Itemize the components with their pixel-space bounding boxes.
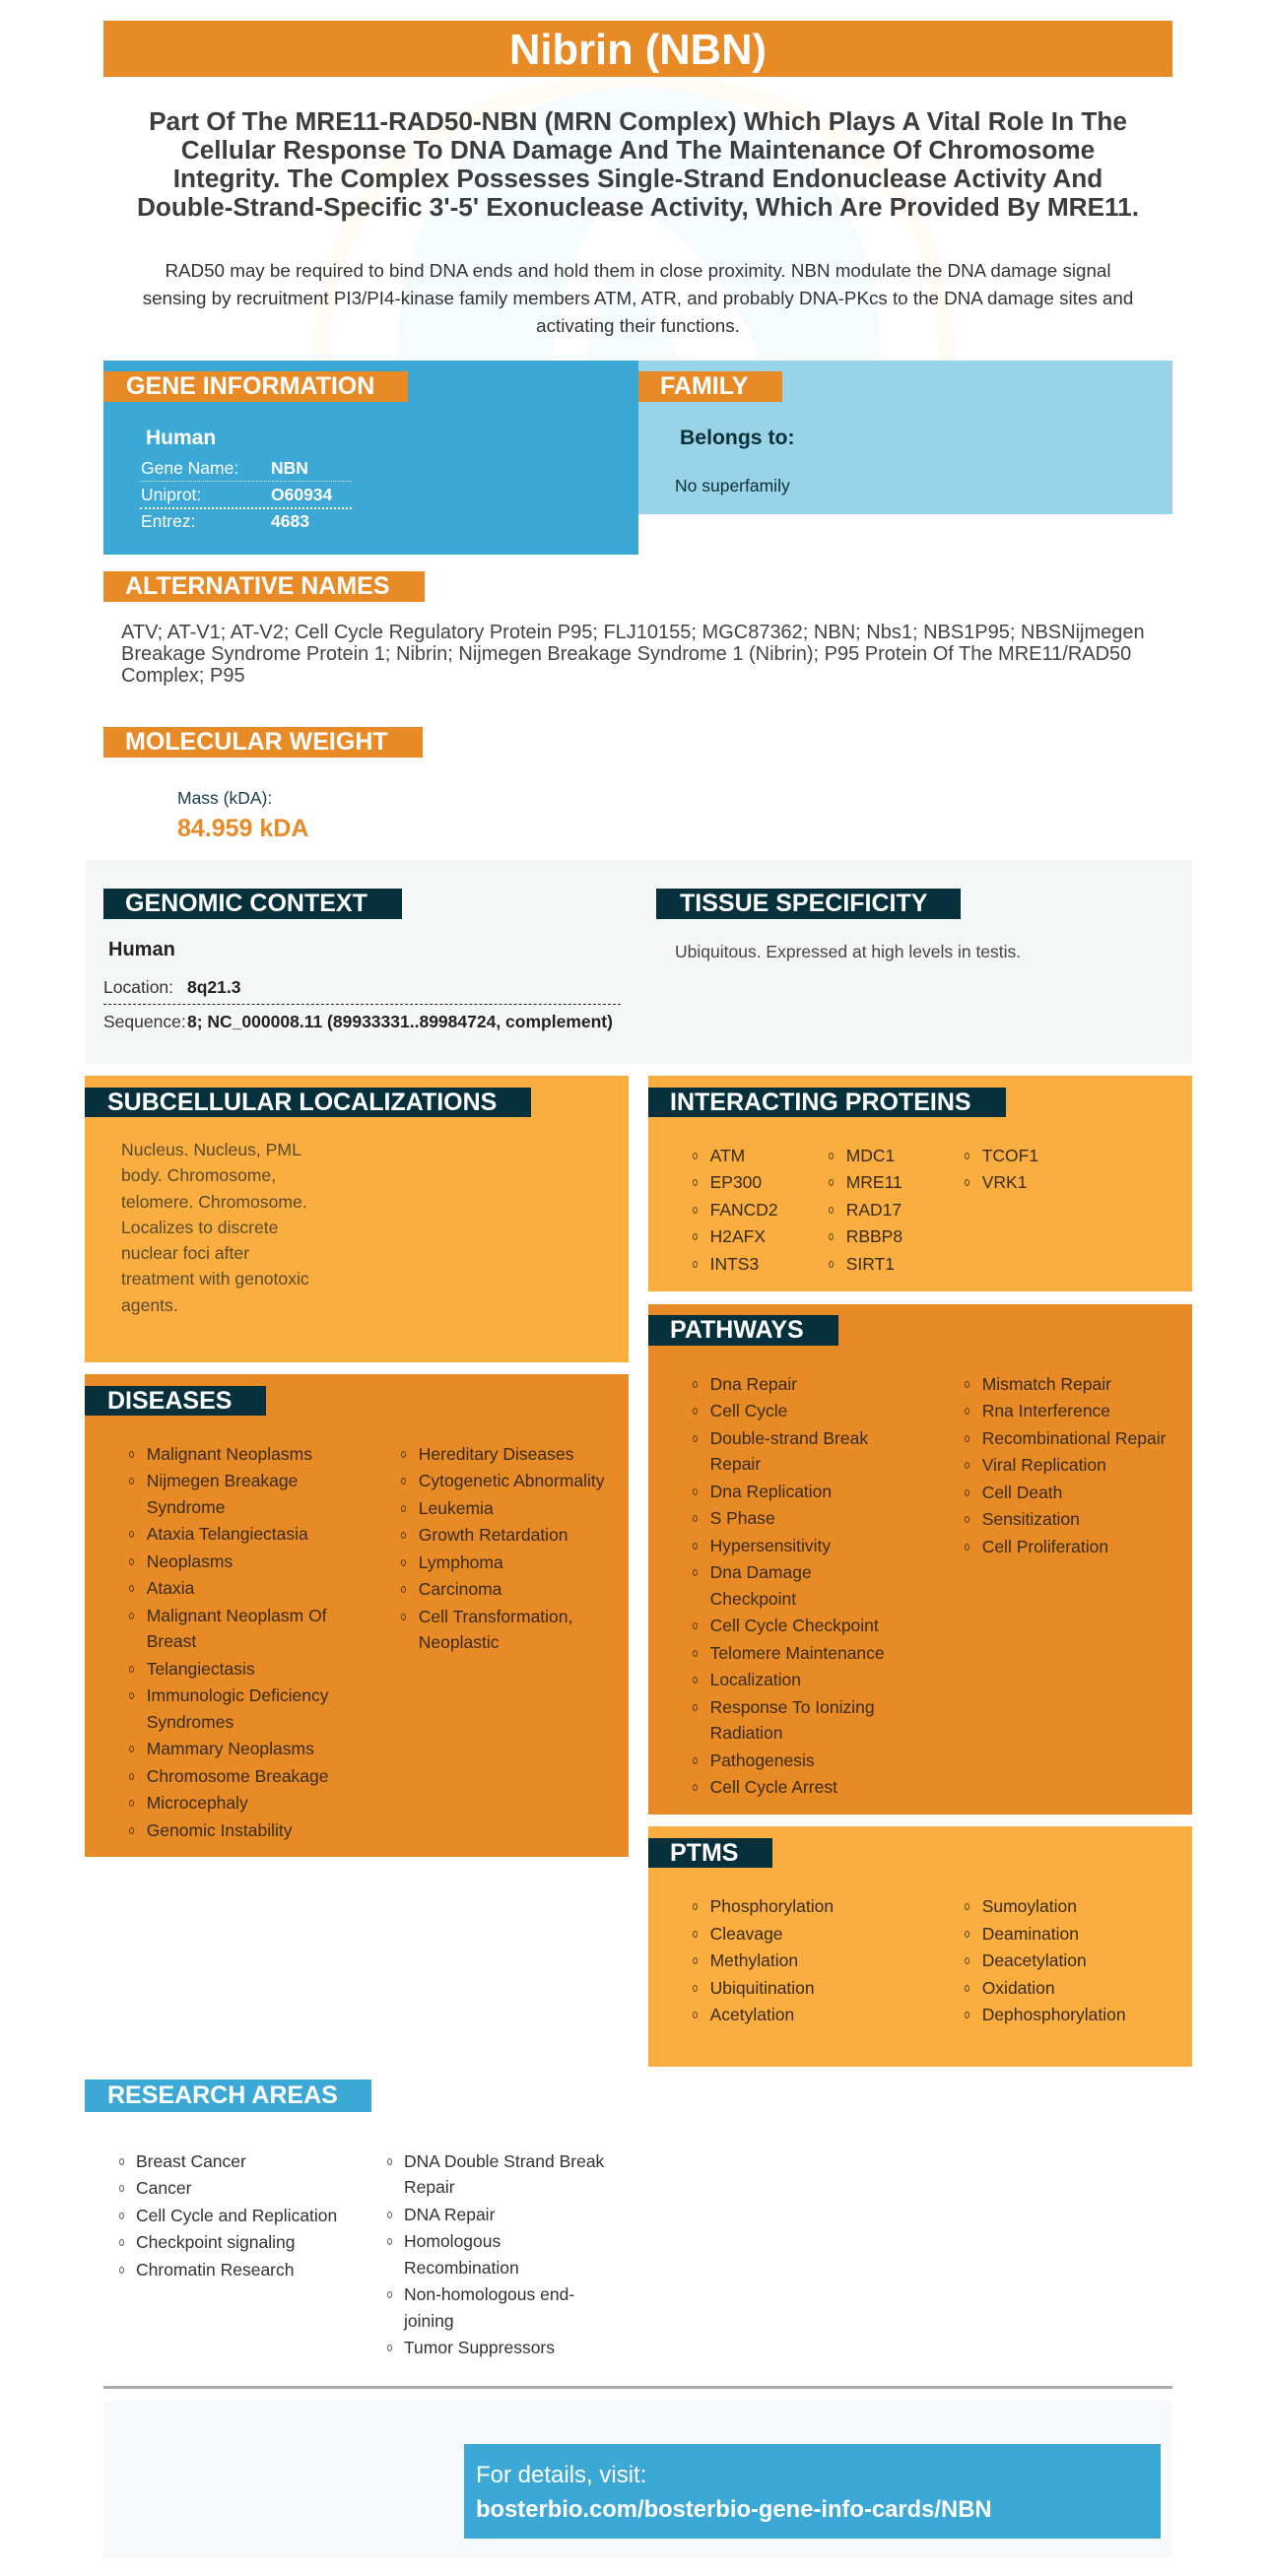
list column 2: Sensitization: [982, 1509, 1080, 1529]
gene name row: [140, 458, 352, 482]
research list column 2: [387, 2151, 605, 2357]
list column 1: Chromosome Breakage: [147, 1766, 329, 1786]
heading: diseases: [85, 1386, 266, 1416]
title: Nibrin (NBN): [509, 27, 767, 74]
list column 1: Phosphorylation: [710, 1896, 834, 1916]
list column 1: H2AFX: [710, 1226, 766, 1246]
list column 2: Neoplastic: [419, 1632, 500, 1652]
list column 1: Repair: [710, 1454, 761, 1474]
heading: alternative names: ALTERNATIVE NAMES: [125, 572, 390, 600]
list column 1: Syndrome: [147, 1497, 225, 1517]
research list column 1: [119, 2151, 337, 2279]
localization text: Localizes to discrete: [121, 1218, 278, 1237]
research list column 2: Non-homologous end-: [404, 2284, 574, 2304]
summary paragraph: activating their functions.: [536, 315, 740, 336]
research list column 1: Checkpoint signaling: [136, 2232, 296, 2252]
callout: details link: [464, 2444, 1161, 2539]
list column 1: Acetylation: [710, 2005, 794, 2024]
research list column 2: joining: [404, 2311, 454, 2331]
list column 1: Ataxia Telangiectasia: [147, 1524, 308, 1544]
sequence row: 8; NC_000008.11 (89933331..89984724, complement): [187, 1012, 613, 1031]
species label: Human: [146, 427, 216, 449]
tissue specificity text: Ubiquitous. Expressed at high levels in testis.: [675, 942, 1021, 961]
heading: subcellular localizations: SUBCELLULAR LOCALIZATIONS: [107, 1089, 497, 1116]
footer rule: [103, 2386, 1172, 2389]
heading: interacting proteins: INTERACTING PROTEINS: [670, 1089, 971, 1116]
list column 1: Malignant Neoplasms: [147, 1444, 312, 1464]
panel: footer: [103, 2401, 1172, 2557]
list column 2: Rna Interference: [982, 1401, 1110, 1420]
localization text: nuclear foci after: [121, 1243, 249, 1263]
panel: pathways: [648, 1304, 1192, 1815]
list column 1: Localization: [710, 1670, 801, 1689]
uniprot row: O60934: [271, 485, 332, 504]
panel: gene information: [103, 361, 638, 555]
list column 1: Syndromes: [147, 1712, 234, 1732]
uniprot row: [140, 485, 352, 509]
list column 1: [693, 1373, 885, 1797]
list column 1: Telangiectasis: [147, 1659, 255, 1679]
location row: Location:: [103, 977, 173, 997]
list column 1: Pathogenesis: [710, 1750, 815, 1769]
gene name row: Gene Name:: [141, 458, 238, 478]
panel: diseases: [85, 1374, 629, 1857]
localization text: telomere. Chromosome.: [121, 1192, 307, 1212]
list column 1: Nijmegen Breakage: [147, 1471, 298, 1490]
panel: genomic context and tissue specificity: [85, 860, 1192, 1064]
research list column 1: Chromatin Research: [136, 2260, 294, 2279]
belongs to label: Belongs to:: [680, 427, 795, 449]
list column 2: [965, 1896, 1126, 2024]
heading: pathways: [648, 1315, 838, 1346]
list column 1: Dna Damage: [710, 1562, 812, 1582]
species label: Human: [108, 939, 175, 960]
family value: No superfamily: [675, 476, 790, 495]
alternative names text: ATV; AT-V1; AT-V2; Cell Cycle Regulatory Protein P95; FLJ10155; MGC87362; NBN; Nbs1; NBS1P95; NBSNijmegen: [121, 622, 1145, 643]
list column 2: SIRT1: [846, 1254, 895, 1274]
list column 2: Cell Death: [982, 1482, 1062, 1501]
headline description: Double-Strand-Specific 3'-5' Exonuclease Activity, Which Are Provided By MRE11.: [137, 191, 1139, 221]
gene name row: NBN: [271, 458, 308, 478]
headline description: Part Of The MRE11-RAD50-NBN (MRN Complex) Which Plays A Vital Role In The: [149, 106, 1127, 136]
research list column 2: Homologous: [404, 2231, 501, 2251]
list column 1: [693, 1146, 778, 1274]
list column 3: [965, 1146, 1038, 1192]
heading: ptms: [648, 1838, 772, 1868]
list column 2: Cell Transformation,: [419, 1607, 572, 1626]
localization text: body. Chromosome,: [121, 1165, 276, 1185]
localization text: treatment with genotoxic: [121, 1269, 309, 1288]
summary paragraph: [143, 260, 1133, 336]
list column 2: Recombinational Repair: [982, 1428, 1166, 1448]
list column 1: S Phase: [710, 1508, 775, 1528]
list column 1: EP300: [710, 1172, 762, 1192]
list column 1: Cell Cycle: [710, 1401, 787, 1420]
panel: interacting proteins: [648, 1076, 1192, 1291]
list column 2: [401, 1444, 605, 1652]
list column 1: Mammary Neoplasms: [147, 1739, 314, 1758]
list column 3: TCOF1: [982, 1146, 1038, 1165]
heading: ptms: PTMS: [670, 1839, 738, 1867]
list column 2: Growth Retardation: [419, 1525, 568, 1545]
summary paragraph: RAD50 may be required to bind DNA ends and hold them in close proximity. NBN modulate the DNA damage signal: [165, 260, 1111, 281]
list column 2: Sumoylation: [982, 1896, 1077, 1916]
heading: family: FAMILY: [660, 372, 748, 400]
panel: family: [638, 361, 1172, 514]
list column 2: Carcinoma: [419, 1579, 501, 1599]
heading: diseases: DISEASES: [107, 1387, 232, 1415]
research list column 2: DNA Repair: [404, 2205, 495, 2224]
list column 2: Leukemia: [419, 1498, 494, 1518]
list column 1: Malignant Neoplasm Of: [147, 1606, 327, 1625]
list column 1: Neoplasms: [147, 1552, 233, 1571]
list column 1: Cell Cycle Arrest: [710, 1777, 837, 1797]
location row: 8q21.3: [187, 977, 240, 997]
title: [103, 21, 1172, 77]
location row: [103, 977, 621, 1005]
research list column 2: Tumor Suppressors: [404, 2338, 555, 2357]
alternative names text: Breakage Syndrome Protein 1; Nibrin; Nijmegen Breakage Syndrome 1 (Nibrin); P95 Protein Of The MRE11/RAD50: [121, 643, 1131, 665]
list column 1: [693, 1896, 834, 2024]
list column 1: Dna Replication: [710, 1482, 832, 1501]
list column 2: [829, 1146, 902, 1274]
alternative names text: [121, 622, 1145, 687]
list column 3: VRK1: [982, 1172, 1027, 1192]
headline description: [137, 106, 1139, 221]
list column 1: Ataxia: [147, 1578, 194, 1598]
summary paragraph: sensing by recruitment PI3/PI4-kinase family members ATM, ATR, and probably DNA-PKcs to the DNA damage sites and: [143, 288, 1133, 308]
research list column 2: DNA Double Strand Break: [404, 2151, 604, 2171]
list column 2: Deacetylation: [982, 1950, 1087, 1970]
list column 1: [129, 1444, 329, 1840]
panel: ptms: [648, 1826, 1192, 2067]
list column 2: Cytogenetic Abnormality: [419, 1471, 605, 1490]
list column 2: Deamination: [982, 1923, 1079, 1943]
alternative names text: Complex; P95: [121, 665, 245, 687]
research list column 1: Breast Cancer: [136, 2151, 246, 2171]
list column 2: Viral Replication: [982, 1455, 1106, 1475]
list column 2: [965, 1373, 1167, 1556]
sequence row: Sequence:: [103, 1012, 186, 1031]
heading: pathways: PATHWAYS: [670, 1316, 804, 1344]
localization text: [121, 1140, 309, 1315]
mass label: Mass (kDA):: [177, 788, 272, 808]
list column 2: Cell Proliferation: [982, 1537, 1108, 1556]
heading: family: [638, 371, 782, 402]
list column 1: Breast: [147, 1631, 196, 1651]
research list column 1: Cell Cycle and Replication: [136, 2206, 337, 2225]
list column 1: FANCD2: [710, 1200, 778, 1220]
heading: gene information: GENE INFORMATION: [126, 372, 374, 400]
heading: tissue specificity: TISSUE SPECIFICITY: [680, 890, 927, 917]
list column 1: INTS3: [710, 1254, 759, 1274]
list column 2: Hereditary Diseases: [419, 1444, 573, 1464]
mass value: 84.959 kDA: [177, 815, 308, 842]
heading: research areas: [85, 2080, 371, 2112]
list column 1: Methylation: [710, 1950, 798, 1970]
list column 1: Telomere Maintenance: [710, 1643, 885, 1663]
heading: genomic context: GENOMIC CONTEXT: [125, 890, 367, 917]
list column 2: Lymphoma: [419, 1552, 503, 1572]
localization text: agents.: [121, 1295, 178, 1315]
list column 1: Double-strand Break: [710, 1428, 868, 1448]
research list column 2: Recombination: [404, 2258, 519, 2278]
entrez row: [141, 511, 309, 531]
list column 1: Cell Cycle Checkpoint: [710, 1616, 879, 1635]
list column 1: Microcephaly: [147, 1793, 248, 1813]
list column 1: Dna Repair: [710, 1373, 797, 1393]
list column 2: Oxidation: [982, 1978, 1055, 1998]
list column 2: MDC1: [846, 1146, 895, 1165]
research list column 1: Cancer: [136, 2178, 191, 2198]
entrez row: Entrez:: [141, 511, 195, 531]
list column 1: Checkpoint: [710, 1588, 796, 1608]
callout label: For details, visit:: [476, 2462, 646, 2488]
list column 2: Dephosphorylation: [982, 2005, 1126, 2024]
entrez row: 4683: [271, 511, 309, 531]
background watermark: [312, 77, 957, 361]
list column 1: Response To Ionizing: [710, 1696, 875, 1716]
list column 2: RAD17: [846, 1200, 902, 1220]
list column 1: Genomic Instability: [147, 1820, 293, 1840]
headline description: Integrity. The Complex Possesses Single-Strand Endonuclease Activity And: [173, 164, 1102, 193]
list column 1: Immunologic Deficiency: [147, 1685, 328, 1705]
callout url: bosterbio.com/bosterbio-gene-info-cards/NBN: [476, 2496, 992, 2523]
headline description: Cellular Response To DNA Damage And The Maintenance Of Chromosome: [181, 134, 1095, 164]
uniprot row: Uniprot:: [141, 485, 201, 504]
list column 1: Radiation: [710, 1723, 783, 1743]
list column 1: Cleavage: [710, 1923, 783, 1943]
research list column 2: Repair: [404, 2177, 455, 2197]
list column 1: Hypersensitivity: [710, 1535, 831, 1554]
localization text: Nucleus. Nucleus, PML: [121, 1140, 301, 1159]
heading: molecular weight: MOLECULAR WEIGHT: [125, 728, 388, 756]
list column 1: ATM: [710, 1146, 745, 1165]
list column 2: Mismatch Repair: [982, 1373, 1111, 1393]
panel: subcellular localizations: [85, 1076, 629, 1362]
heading: research areas: RESEARCH AREAS: [107, 2081, 338, 2109]
list column 1: Ubiquitination: [710, 1978, 815, 1998]
list column 2: RBBP8: [846, 1226, 902, 1246]
list column 2: MRE11: [846, 1172, 902, 1192]
